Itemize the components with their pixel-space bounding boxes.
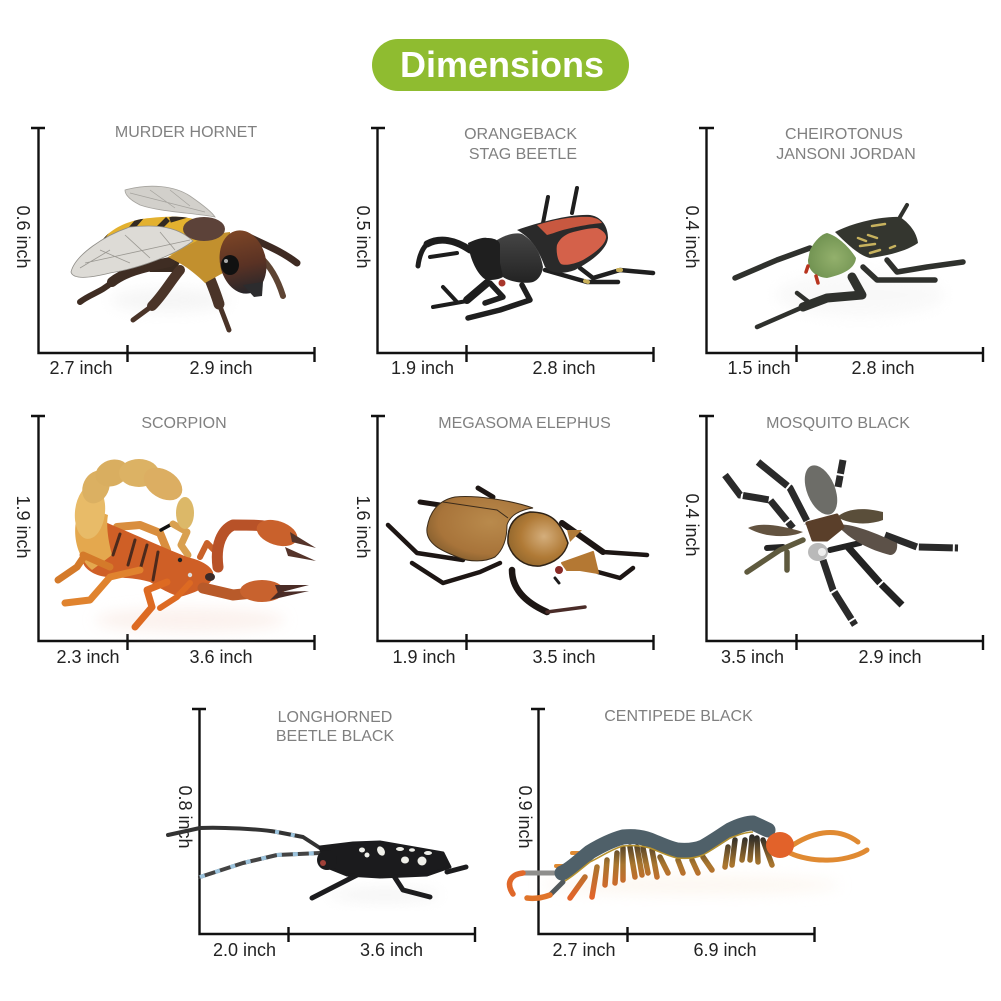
axes: megasoma elephus xyxy=(371,416,654,650)
panel: orangeback stag beetle xyxy=(353,126,654,378)
panel: cheirotonus jansoni jordan: JANSONI JORDAN xyxy=(776,146,916,163)
panel: longhorned beetle black: BEETLE BLACK xyxy=(276,728,394,745)
axes: scorpion xyxy=(31,416,315,650)
illustration: centipede xyxy=(510,823,867,898)
axes: cheirotonus xyxy=(699,128,983,362)
axes: murder hornet xyxy=(31,128,315,362)
axes: longhorned beetle xyxy=(192,709,475,942)
panel: scorpion xyxy=(13,415,316,667)
heading: mosquito black: MOSQUITO BLACK xyxy=(766,415,910,432)
heading: scorpion: SCORPION xyxy=(141,415,227,432)
height label: 0.8 inch: 0.8 inch xyxy=(175,785,195,849)
illustration: stag beetle xyxy=(418,188,653,318)
width label: 1.9 inch: 1.9 inch xyxy=(391,358,454,378)
title pill: Dimensions: Dimensions xyxy=(400,44,604,85)
illustration: mosquito xyxy=(725,460,958,625)
width label: 6.9 inch: 6.9 inch xyxy=(693,940,757,960)
axes: orangeback stag beetle xyxy=(371,128,654,362)
axes: centipede black xyxy=(531,709,815,942)
width label: 1.9 inch: 1.9 inch xyxy=(392,647,456,667)
width label: 1.5 inch: 1.5 inch xyxy=(727,358,791,378)
illustration: scorpion xyxy=(58,455,316,632)
height label: 0.4 inch: 0.4 inch xyxy=(682,493,702,557)
panel: mosquito black xyxy=(682,415,983,667)
panel: cheirotonus jansoni jordan xyxy=(682,126,983,378)
width label: 2.7 inch: 2.7 inch xyxy=(552,940,616,960)
axes: mosquito black xyxy=(699,416,983,650)
illustration: megasoma beetle xyxy=(388,488,647,612)
illustration: longhorned beetle xyxy=(168,828,466,902)
illustration: murder hornet xyxy=(71,186,297,330)
width label: 3.5 inch: 3.5 inch xyxy=(532,647,596,667)
panel: megasoma elephus xyxy=(353,415,654,667)
width label: 2.8 inch: 2.8 inch xyxy=(851,358,915,378)
heading: orangeback stag beetle: ORANGEBACK xyxy=(464,126,577,143)
panel: longhorned beetle black xyxy=(168,709,475,960)
width label: 3.6 inch: 3.6 inch xyxy=(189,647,253,667)
heading: longhorned beetle: LONGHORNED xyxy=(278,709,392,726)
width label: 2.7 inch: 2.7 inch xyxy=(49,358,113,378)
width label: 2.3 inch: 2.3 inch xyxy=(56,647,120,667)
title pill: Dimensions xyxy=(372,39,629,91)
height label: 0.6 inch: 0.6 inch xyxy=(13,205,33,269)
width label: 2.0 inch: 2.0 inch xyxy=(213,940,276,960)
height label: 0.9 inch: 0.9 inch xyxy=(515,785,535,849)
panel: orangeback stag beetle: STAG BEETLE xyxy=(469,146,577,163)
width label: 3.6 inch: 3.6 inch xyxy=(360,940,423,960)
height label: 0.4 inch: 0.4 inch xyxy=(682,205,702,269)
width label: 2.9 inch: 2.9 inch xyxy=(189,358,253,378)
width label: 3.5 inch: 3.5 inch xyxy=(721,647,784,667)
heading: cheirotonus: CHEIROTONUS xyxy=(785,126,903,143)
heading: megasoma elephus: MEGASOMA ELEPHUS xyxy=(438,415,611,432)
heading: murder hornet: MURDER HORNET xyxy=(115,124,257,141)
height label: 1.6 inch: 1.6 inch xyxy=(353,495,373,559)
height label: 0.5 inch: 0.5 inch xyxy=(353,205,373,269)
panel: centipede black xyxy=(510,708,867,960)
width label: 2.9 inch: 2.9 inch xyxy=(858,647,922,667)
heading: centipede black: CENTIPEDE BLACK xyxy=(604,708,753,725)
panel: murder hornet xyxy=(13,124,315,378)
height label: 1.9 inch: 1.9 inch xyxy=(13,495,33,559)
width label: 2.8 inch: 2.8 inch xyxy=(532,358,596,378)
illustration: cheirotonus beetle xyxy=(735,205,963,327)
